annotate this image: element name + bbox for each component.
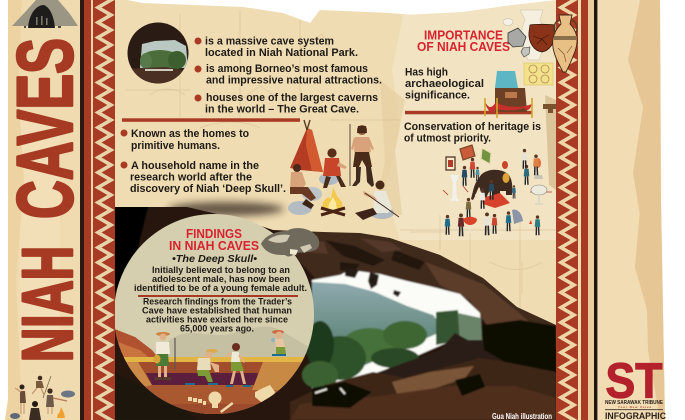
cave arch rock xyxy=(280,228,560,350)
archaeologist crouching xyxy=(185,349,219,385)
display table xyxy=(531,185,547,195)
excavation scene xyxy=(115,326,308,414)
illustration: cave people xyxy=(10,376,75,420)
heading: findings: FINDINGS xyxy=(186,226,242,241)
text: trader's cave finding: Research findings from the Trader’s xyxy=(143,296,292,308)
heading: findings: IN NIAH CAVES xyxy=(169,238,259,253)
text: conservation of heritage xyxy=(404,121,541,144)
icon: deep skull fossil xyxy=(261,228,319,257)
mammoth xyxy=(471,170,512,208)
text: trader's cave finding xyxy=(142,296,292,334)
yellow card xyxy=(524,63,553,85)
bullet list: cave facts: in the world – The Great Cave. xyxy=(205,104,359,116)
text: deep skull finding xyxy=(134,265,307,294)
bullet list: cave facts: is among Borneo’s most famous xyxy=(206,63,368,75)
bullet list: cave facts: houses one of the largest caverns xyxy=(206,92,378,104)
archaeologist standing xyxy=(154,332,175,380)
bullet list: primitive humans xyxy=(120,128,286,195)
grey shell exhibit xyxy=(512,210,523,224)
paper: central sheet xyxy=(115,0,556,420)
text: archaeological significance: significance. xyxy=(405,90,470,102)
distant hills xyxy=(310,281,438,366)
bullet list: cave facts: located in Niah National Park. xyxy=(205,47,358,59)
cave illustration xyxy=(110,200,560,420)
seated person left xyxy=(290,164,316,209)
cave opening sky xyxy=(312,270,482,395)
archaeologist kneeling with magnifier xyxy=(271,330,286,356)
logo: ST New Sarawak Tribune Infographic: ST xyxy=(606,354,663,408)
icon: cave mountain xyxy=(12,0,78,28)
subheading: the deep skull: •The Deep Skull• xyxy=(172,253,257,265)
text: conservation of heritage: of utmost priority. xyxy=(404,132,491,144)
bullet list: primitive humans: primitive humans. xyxy=(131,140,220,152)
text: deep skull finding: identified to be of a young female adult. xyxy=(134,283,307,294)
heading: findings xyxy=(169,226,259,253)
skull and bones xyxy=(188,385,275,413)
cave floor xyxy=(290,320,556,420)
heading rule: upper left divider xyxy=(122,118,300,122)
logo: ST New Sarawak Tribune Infographic: NEW SARAWAK TRIBUNE xyxy=(605,400,663,406)
grey stone xyxy=(508,28,526,47)
bullet list: primitive humans: research world after the xyxy=(130,172,252,184)
standing man with spear xyxy=(350,124,374,187)
illustration: primitive humans camp xyxy=(288,120,399,220)
illustration: museum visitors and mammoth xyxy=(443,145,552,236)
people xyxy=(470,158,475,178)
text: archaeological significance xyxy=(405,66,484,102)
text: deep skull finding: adolescent male, has now been xyxy=(152,274,290,285)
title: Niah Caves xyxy=(0,38,89,362)
tent xyxy=(290,128,323,172)
seated woman xyxy=(355,180,399,220)
amphora xyxy=(553,15,577,72)
text: trader's cave finding: 65,000 years ago. xyxy=(180,324,254,334)
archaeologist girl xyxy=(224,343,251,387)
decorative band: left xyxy=(80,0,115,420)
red pot xyxy=(529,24,555,52)
fire xyxy=(57,407,65,418)
heading: importance of Niah Caves: IMPORTANCE xyxy=(424,28,503,42)
bullet list: cave facts: and impressive natural attractions. xyxy=(206,74,382,86)
rock ridge xyxy=(376,333,504,378)
text: archaeological significance: Has high xyxy=(405,66,448,78)
woman with spear xyxy=(46,388,67,414)
paper: left strip xyxy=(5,0,80,420)
seated figure xyxy=(29,401,41,420)
illustration: museum display case xyxy=(484,71,557,118)
decorative band: right xyxy=(556,0,597,420)
heading: importance of Niah Caves: OF NIAH CAVES xyxy=(417,39,510,54)
rope xyxy=(443,186,552,195)
rocks xyxy=(288,201,312,215)
text: deep skull finding: Initially believed to belong to an xyxy=(152,265,290,276)
title: Niah Caves: NIAH xyxy=(9,246,88,362)
findings circle panel xyxy=(112,214,316,420)
seated person red tunic xyxy=(323,148,347,188)
red exhibit xyxy=(463,217,477,225)
illustration: pottery artefacts xyxy=(503,10,577,85)
hunter xyxy=(32,376,51,398)
artefact stands xyxy=(502,161,508,169)
logo: ST New Sarawak Tribune Infographic: Your New Voice xyxy=(618,405,651,409)
campfire xyxy=(321,187,345,215)
text: trader's cave finding: Cave have established that human xyxy=(142,306,292,316)
stalactites xyxy=(345,268,401,297)
oval shard xyxy=(503,18,513,26)
bullet list: primitive humans: A household name in the xyxy=(131,160,259,172)
text: conservation of heritage: Conservation of heritage is xyxy=(404,121,541,133)
bullet list: primitive humans: Known as the homes to xyxy=(131,128,249,140)
paper: right strip xyxy=(588,0,665,420)
white statue xyxy=(450,175,459,201)
man with axe xyxy=(15,384,26,414)
text: trader's cave finding: activities have existed here since xyxy=(146,314,288,326)
text: archaeological significance: archaeological xyxy=(405,78,484,90)
white vase xyxy=(520,10,544,60)
bullet list: cave facts: is a massive cave system xyxy=(205,36,334,48)
heading: importance of Niah Caves xyxy=(417,28,510,54)
shadow above cave xyxy=(168,202,284,216)
bullet list: cave facts xyxy=(194,36,382,116)
forest xyxy=(302,310,482,389)
rocks xyxy=(61,390,75,398)
divider rule: importance xyxy=(405,111,532,114)
paintings xyxy=(446,157,455,170)
circular cave photo xyxy=(127,22,189,84)
bullet list: primitive humans: discovery of Niah ‘Deep Skull’. xyxy=(130,183,286,195)
